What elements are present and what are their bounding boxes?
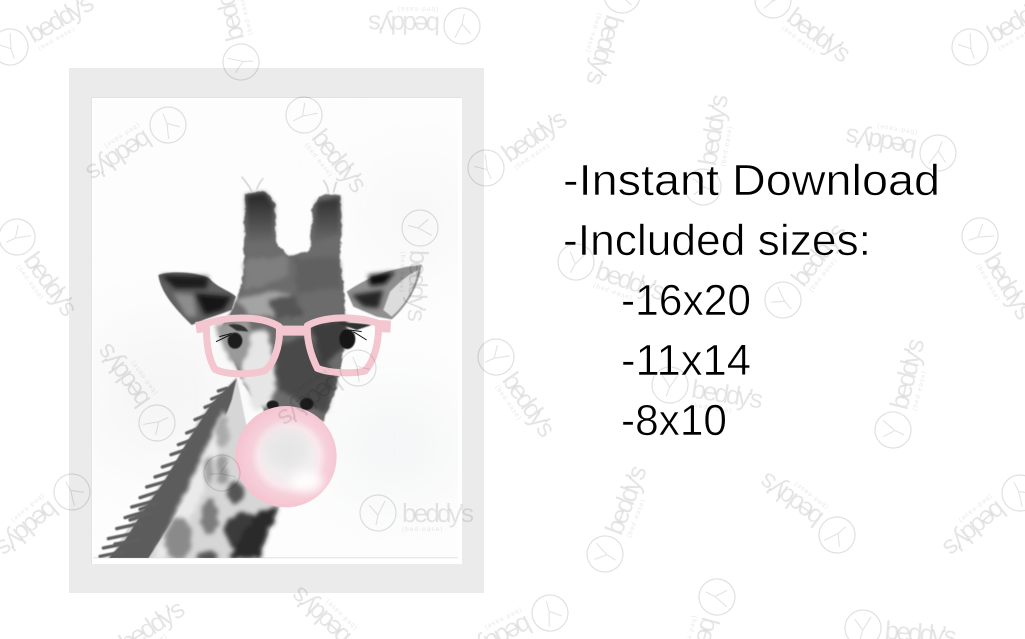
watermark pattern: (bed·ease): [129, 358, 159, 396]
watermark pattern: (bed·ease): [9, 492, 45, 524]
watermark pattern: (bed·ease): [402, 526, 443, 533]
picture frame: [69, 68, 484, 593]
watermark pattern: (bed·ease): [720, 125, 734, 167]
watermark pattern: beddy's: [692, 92, 734, 168]
watermark pattern: (bed·ease): [493, 384, 523, 422]
watermark pattern: (bed·ease): [15, 264, 45, 302]
watermark pattern: (bed·ease): [102, 121, 141, 150]
right ear: [347, 265, 422, 319]
line: 8x10: -8x10: [621, 396, 727, 445]
line: 11x14: -11x14: [621, 336, 751, 385]
watermark pattern: (bed·ease): [957, 493, 993, 524]
watermark pattern: (bed·ease): [911, 370, 928, 412]
watermark pattern: (bed·ease): [876, 122, 918, 136]
watermark pattern: beddy's: [90, 338, 156, 414]
watermark pattern: beddy's: [496, 103, 572, 168]
watermark pattern: beddy's: [580, 12, 630, 89]
nostrils: [267, 398, 313, 410]
watermark pattern: (bed·ease): [793, 480, 830, 510]
watermark pattern: (bed·ease): [324, 597, 359, 631]
watermark pattern: (bed·ease): [398, 251, 406, 293]
line: instant download: -Instant Download: [563, 156, 940, 205]
bubble gum: [235, 406, 337, 507]
watermark pattern: beddy's: [785, 217, 853, 292]
watermark pattern: (bed·ease): [483, 606, 523, 631]
watermark pattern: (bed·ease): [592, 282, 634, 302]
horns and head: [215, 177, 372, 422]
giraffe artwork: [98, 176, 422, 558]
watermark pattern: beddy's: [402, 249, 434, 322]
watermark pattern: beddy's: [938, 495, 1012, 564]
watermark pattern: beddy's: [753, 466, 828, 534]
watermark pattern: beddy's: [689, 374, 765, 415]
watermark pattern: beddy's: [599, 461, 653, 539]
watermark pattern: beddy's: [81, 124, 158, 189]
product details text: [563, 156, 940, 445]
line: included sizes: -Included sizes:: [563, 216, 871, 265]
watermark pattern: beddy's: [368, 9, 440, 41]
watermark pattern: (bed·ease): [808, 256, 839, 293]
left ear: [158, 272, 236, 325]
watermark pattern: beddy's: [306, 123, 374, 198]
watermark pattern: (bed·ease): [691, 402, 733, 415]
eyes: [216, 329, 367, 349]
watermark pattern: (bed·ease): [513, 142, 551, 171]
watermark pattern: (bed·ease): [626, 498, 647, 539]
watermark pattern: (bed·ease): [397, 5, 438, 13]
watermark pattern: beddy's: [402, 498, 474, 528]
mane: [100, 378, 237, 558]
neck spots: [164, 415, 278, 562]
watermark pattern: (bed·ease): [780, 25, 817, 55]
watermark pattern: beddy's: [843, 122, 919, 164]
watermark pattern: (bed·ease): [293, 365, 331, 395]
watermark pattern: beddy's: [782, 1, 857, 69]
watermark pattern: beddy's: [592, 255, 670, 307]
line: 16x20: -16x20: [621, 276, 751, 325]
watermark pattern: beddy's: [272, 368, 349, 434]
watermark pattern: beddy's: [884, 335, 930, 412]
watermark pattern: (bed·ease): [975, 263, 1001, 303]
soft backdrop: [100, 170, 460, 490]
watermark pattern: (bed·ease): [303, 142, 334, 179]
watermark pattern: (bed·ease): [37, 26, 77, 52]
pink glasses: [196, 318, 391, 374]
watermark pattern: (bed·ease): [584, 12, 603, 54]
watermark pattern: beddy's: [496, 366, 562, 443]
watermark pattern: beddy's: [18, 246, 84, 322]
neck: [100, 377, 280, 562]
